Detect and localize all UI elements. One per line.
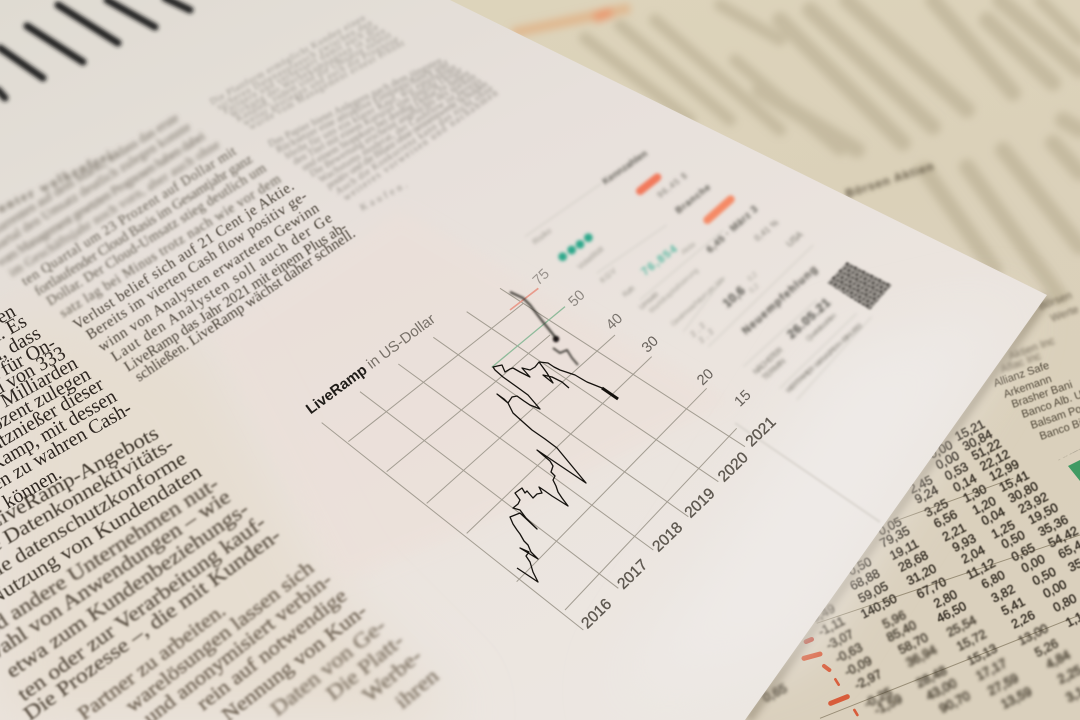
photo scene: newspaper with LiveRamp chart: 11,12	[964, 556, 998, 582]
price line: thick end	[602, 388, 618, 399]
paper: cool right tone	[620, 310, 1010, 700]
photo scene: newspaper with LiveRamp chart: 5,96	[880, 608, 908, 632]
photo scene: newspaper with LiveRamp chart: -1,11	[816, 614, 847, 639]
text block: blurred upper column B: Kaufen.	[358, 180, 409, 214]
text block: blurred upper column A: weiter gestiegen und auch die Prognose	[242, 35, 400, 129]
chart title: LiveRamp in US-Dollar	[303, 311, 439, 418]
photo scene: newspaper with LiveRamp chart: 3,25	[922, 496, 951, 520]
text block: blurred upper column B: Wachstums moderat, der Cashflow ist bereits	[317, 75, 484, 186]
year axis labels	[578, 414, 780, 632]
newsprint: blurred upper list: Werte	[1049, 304, 1080, 325]
photo scene: newspaper with LiveRamp chart: 58,70	[896, 630, 930, 657]
text block: blurred upper column A: Wirkung der Werbekampagnen in allen	[229, 26, 388, 121]
photo scene: newspaper with LiveRamp chart: 67,70	[914, 575, 949, 602]
photo scene: newspaper with LiveRamp chart: -0,25	[861, 684, 895, 711]
text block: middle article column, far lines: vom Management gesetzten Prognosen haben dabei	[0, 128, 208, 270]
photo scene: newspaper with LiveRamp chart: 25,54	[944, 613, 979, 640]
panel: stock data table: Quartalszahlen	[804, 311, 838, 343]
photo scene: newspaper with LiveRamp chart: 0,04	[979, 505, 1007, 528]
panel: stock data table: WERTPAPIER · WKN A2P6YH · ISIN US53	[785, 323, 864, 395]
photo scene: newspaper with LiveRamp chart: -1,59	[871, 691, 905, 718]
panel: stock data table: 0,2	[745, 270, 759, 283]
photo scene: newspaper with LiveRamp chart: 15,72	[954, 627, 989, 654]
photo scene: newspaper with LiveRamp chart: 2,26	[1009, 608, 1037, 632]
photo scene: newspaper with LiveRamp chart: 6,56	[931, 507, 960, 531]
text block: left article paragraph 1	[0, 300, 135, 515]
photo scene: newspaper with LiveRamp chart: 5,26	[1032, 636, 1061, 660]
text block: middle article column, near lines: winn von Analysten erwarteten Gewinn	[95, 200, 323, 355]
panel: stock data table: Risiko	[531, 226, 554, 247]
text block: blurred upper column A: sicheren Datenaustausch zwischen den	[216, 18, 375, 113]
photo scene: newspaper with LiveRamp chart: 0,65	[1009, 541, 1037, 564]
text block: blurred upper column B: und einem Stoppkurs bei dreißig Dollar zu halten	[300, 68, 472, 174]
panel: stock data table: Marktkapitalisierung	[647, 266, 700, 315]
photo scene: newspaper with LiveRamp chart: 15,13	[965, 641, 999, 668]
panel: stock data table: 2,2	[697, 327, 716, 345]
photo scene: newspaper with LiveRamp chart: 35,36	[1036, 512, 1070, 539]
panel: stock data table: TERMIN	[760, 356, 788, 382]
photo scene: newspaper with LiveRamp chart: 0,00	[927, 438, 955, 462]
text block: blurred upper column B	[266, 56, 500, 214]
table rule lines	[525, 183, 872, 400]
photo scene: newspaper with LiveRamp chart: 28,48	[913, 663, 949, 691]
photo scene: newspaper with LiveRamp chart: 1,20	[970, 494, 998, 518]
value axis labels: 75	[530, 266, 553, 289]
photo scene: newspaper with LiveRamp chart: 3,82	[989, 582, 1017, 606]
text block: middle article column, far lines: im Geschäftsjahr noch vorn, aber auch ohne	[6, 136, 222, 280]
year axis labels: 2016	[578, 596, 615, 632]
photo scene: newspaper with LiveRamp chart: -2,97	[852, 667, 884, 693]
photo scene: newspaper with LiveRamp chart: 51,22	[969, 436, 1004, 463]
newsprint: number table	[817, 478, 1080, 718]
text block: left article paragraph 3	[73, 556, 371, 720]
newsprint: blurred stock columns top right	[585, 0, 1080, 297]
photo scene: newspaper with LiveRamp chart: 13,59	[998, 684, 1034, 712]
price line: branch	[539, 362, 569, 388]
newsprint: company names list: Allianz Safe	[992, 360, 1051, 390]
photo scene: newspaper with LiveRamp chart: 27,59	[985, 670, 1021, 698]
newsprint: blurred upper list	[999, 290, 1080, 376]
newsprint: company names list: Brasher Bani	[1010, 379, 1074, 411]
value axis labels: 50	[566, 287, 589, 310]
photo scene: newspaper with LiveRamp chart: 30,84	[960, 427, 995, 454]
label: red change value	[707, 199, 731, 220]
photo scene: newspaper with LiveRamp chart: 15,41	[997, 468, 1031, 495]
sheet edge shadow	[747, 297, 1047, 720]
photo scene: newspaper with LiveRamp chart: 19,11	[887, 537, 921, 563]
photo scene: newspaper with LiveRamp chart: Daten von Ge-	[266, 614, 390, 720]
photo scene: newspaper with LiveRamp chart: 2,45	[907, 473, 935, 497]
value axis labels	[530, 266, 755, 410]
text block: middle article column, near lines: schließen. LiveRamp wächst daher schnell.	[132, 226, 358, 385]
photo scene: newspaper with LiveRamp chart: 0,80	[1051, 591, 1079, 615]
text block: blurred upper column A: wurde vom Management erneut erhöht	[248, 38, 407, 133]
photo scene: newspaper with LiveRamp chart: 0,49	[809, 601, 837, 625]
newsprint: company names list: Arkemann	[1002, 373, 1053, 401]
newsprint: green block with ANZ heading	[1054, 430, 1080, 481]
panel: stock data table: 96,45 $	[655, 170, 689, 200]
text block: middle article column, near lines: Laut den Analysten soll auch der Ge	[108, 210, 336, 365]
text block: blurred upper column A: Kanälen, zudem sind die Umsätze zuletzt	[235, 30, 394, 125]
text block: left article paragraph 1: können.	[0, 462, 66, 513]
text block: left article paragraph 3: warelösungen lassen sich	[121, 556, 318, 717]
text block: middle article column, mid lines: fortlaufender Cloud Basis im Gesamtjahr ganz	[32, 152, 256, 299]
text block: left article paragraph 2, soft lines: Die Prozesse –, die mit Kunden-	[19, 523, 285, 720]
value axis labels: 40	[603, 311, 626, 334]
year axis labels: 2017	[614, 556, 651, 593]
label: Neuempfehlung: Neuempfehlung	[740, 264, 820, 337]
newsprint: blurred upper list: Aktien Inc	[1007, 335, 1057, 363]
text block: middle article column, near lines	[70, 178, 358, 385]
line chart: LiveRamp in US-Dollar	[303, 266, 780, 632]
text block: blurred upper column B: Das Papier bietet Anlegern nach dem jüngsten	[266, 56, 444, 150]
photo scene: newspaper with LiveRamp chart: 54,42	[1046, 524, 1080, 551]
photo scene: newspaper with LiveRamp chart: 22,12	[978, 447, 1012, 474]
value axis labels: 15	[732, 387, 755, 410]
photo scene: newspaper with LiveRamp chart: 90,70	[937, 688, 973, 716]
text block: blurred upper column A: Partnern und verbessert damit auch die	[222, 23, 380, 117]
text block: middle article column, mid lines: ten Quartal um 23 Prozent auf Dollar mit	[19, 144, 239, 289]
photo scene: newspaper with LiveRamp chart: 28,68	[896, 548, 930, 575]
price line: lower section	[493, 362, 618, 582]
text block: left article paragraph 2, soft lines: ten oder zur Verarbeitung kauf-	[13, 510, 270, 705]
photo scene: newspaper with LiveRamp chart: Die Platt-	[321, 629, 408, 705]
photo scene: newspaper with LiveRamp chart: 0,53	[942, 460, 971, 483]
panel: stock data table	[525, 148, 872, 400]
newsprint: blurred upper list: Aflac Inc	[999, 350, 1043, 376]
text block: blurred upper column B: positiv und die Bilanz ohne nennenswerte Schulden	[325, 79, 490, 192]
photo scene: newspaper with LiveRamp chart: ihren	[390, 664, 443, 713]
panel: stock data table: Gewinnwachstum pro Jahr	[669, 274, 727, 328]
newsprint: blurred section heading: Börsen Aktien	[844, 159, 935, 201]
panel: stock data table: 0,2	[747, 281, 761, 295]
text block: left article paragraph 2, soft lines: etwa zum Kundenbeziehungs-	[2, 497, 253, 682]
photo scene: newspaper with LiveRamp chart: 9,24	[912, 483, 941, 507]
year axis labels: 2020	[715, 449, 752, 486]
label: green value: 76,854	[639, 243, 680, 278]
text block: blurred upper column B: Die Bewertung erscheint angesichts des starken	[308, 71, 478, 180]
panel: stock data table: Branche	[673, 182, 712, 216]
panel: stock data table: USA	[784, 229, 805, 249]
icon: blurred black bars top left	[0, 0, 190, 98]
photo scene: newspaper with LiveRamp chart: 0,50	[999, 528, 1027, 552]
photo scene: newspaper with LiveRamp chart: 0,05	[876, 515, 904, 538]
paper: warm lower left tone	[0, 300, 460, 720]
photo scene: newspaper with LiveRamp chart: 2,80	[931, 587, 960, 611]
text block: blurred upper column B: weiteres vorweisen und nachahmen	[341, 88, 500, 203]
photo scene: newspaper with LiveRamp chart: 0,00	[1019, 552, 1047, 576]
label: ratings header: Kennzahlen	[600, 148, 650, 187]
panel: stock data table: KGV	[598, 266, 619, 285]
text block: middle article column, near lines: LiveRamp das Jahr 2021 mit einem Plus ab-	[121, 219, 350, 375]
photo scene: newspaper with LiveRamp chart: 0,14	[951, 471, 979, 495]
photo scene: newspaper with LiveRamp chart: 15,21	[953, 417, 987, 444]
photo scene: newspaper with LiveRamp chart: 23,92	[1016, 490, 1050, 517]
panel: stock data table: 0,41 %	[752, 217, 781, 243]
photo scene: newspaper with LiveRamp chart: 0,00	[933, 449, 962, 472]
photo scene: newspaper with LiveRamp chart: 5,41	[999, 595, 1027, 618]
text block: blurred upper column B: bleibt für uns ein klarer Kauf, wir empfehlen	[283, 62, 458, 162]
newsprint: blurred upper list: Börsen	[1037, 290, 1074, 313]
photo scene: newspaper with LiveRamp chart: 30,80	[1006, 479, 1040, 506]
photo scene: newspaper with LiveRamp chart: 68,88	[848, 566, 882, 593]
photo scene: newspaper with LiveRamp chart: 36,94	[903, 642, 939, 670]
text block: blurred upper column A: Die Plattform ermöglicht Kunden einen	[208, 13, 368, 108]
photo scene: newspaper with LiveRamp chart: 46,50	[934, 599, 969, 626]
photo scene: newspaper with LiveRamp chart: Werbe-	[358, 644, 426, 707]
price line: upper blurred section	[510, 292, 578, 365]
photo scene: newspaper with LiveRamp chart: 0,50	[1030, 565, 1058, 588]
panel: stock data table: Aktie	[679, 239, 697, 257]
photo scene: newspaper with LiveRamp chart: 0,50	[846, 555, 874, 578]
panel: stock data table: 2,2	[689, 321, 707, 339]
year axis labels: 2018	[649, 519, 686, 556]
photo scene: newspaper with LiveRamp chart: 4,84	[1043, 647, 1073, 672]
label: bold ratio: 10,6	[720, 283, 748, 311]
photo scene: newspaper with LiveRamp chart: 2,04	[959, 543, 987, 567]
panel: stock data table: Volatilität	[575, 244, 606, 272]
value axis labels: 20	[694, 366, 717, 389]
value axis labels: 30	[639, 333, 662, 356]
table rules	[817, 478, 1080, 718]
icon: green rating dots	[558, 233, 593, 261]
text block: blurred upper column B: den Titel mit einem Kursziel von fünfzig Dollar	[291, 65, 465, 168]
text block: blurred upper column A	[208, 13, 407, 133]
newsprint: red change bars	[804, 639, 857, 715]
photo scene: newspaper with LiveRamp chart: 12,99	[987, 457, 1021, 484]
photo scene: newspaper with LiveRamp chart: 0,65	[760, 680, 789, 705]
photo scene: newspaper with LiveRamp chart: 43,00	[923, 675, 959, 703]
photo scene: newspaper with LiveRamp chart: -0,09	[842, 654, 874, 679]
newsprint: company names list	[992, 360, 1080, 443]
photo scene: newspaper with LiveRamp chart: 2,21	[940, 521, 968, 544]
photo scene: newspaper with LiveRamp chart: 0,00	[1041, 577, 1069, 601]
panel: stock data table: Umsatz	[637, 289, 661, 311]
text block: blurred upper column B: Rücksetzer eine attraktive Einstiegschance und	[274, 59, 450, 156]
photo scene: newspaper with LiveRamp chart: 17,17	[973, 655, 1009, 683]
icon: QR code	[827, 262, 892, 310]
threshold marks: stop line and target line	[510, 288, 538, 310]
text block: left article paragraph 3: rein auf notwendige	[192, 584, 351, 715]
text block: middle article column, mid lines: Dollar. Der Cloud-Umsatz stieg deutlich um	[44, 161, 269, 309]
photo scene: newspaper with LiveRamp chart: 59,05	[856, 579, 890, 606]
paper: pink chart panel tone	[212, 210, 730, 582]
photo scene: newspaper with LiveRamp chart: 140,50	[858, 591, 899, 621]
photo scene: newspaper with LiveRamp chart: 19,50	[1026, 500, 1060, 527]
text block: middle article column, near lines: Verlust belief sich auf 21 Cent je Aktie.	[70, 178, 297, 333]
photo scene: newspaper with LiveRamp chart: 6,80	[979, 568, 1007, 592]
text block: middle article column, mid lines: satz lag bei Minus trotz nach wie vor dem	[57, 172, 284, 321]
grid lines	[322, 288, 745, 630]
photo scene: newspaper with LiveRamp chart: -3,07	[824, 627, 856, 653]
photo scene: newspaper with LiveRamp chart: 1,30	[961, 482, 989, 506]
photo scene: newspaper with LiveRamp chart: 13,00	[1016, 621, 1050, 648]
newsprint: orange heading smear	[512, 8, 630, 33]
label: red price	[640, 177, 657, 191]
panel: stock data table: 6,45 · März 3	[705, 204, 761, 256]
label: next date: 26.05.21	[784, 295, 833, 342]
text block: middle article column, near lines: Bereits im vierten Cash flow positiv ge-	[83, 188, 310, 343]
text block: blurred upper column B: Auch die Konkurrenz kann das nicht ohne	[334, 83, 496, 197]
photo scene: newspaper with LiveRamp chart: 79,35	[878, 524, 912, 551]
panel: stock data table: NÄCHSTER	[751, 345, 785, 376]
photo scene: newspaper with LiveRamp chart: 9,93	[950, 531, 978, 555]
photo scene: newspaper with LiveRamp chart: -0,63	[833, 640, 865, 666]
photo scene: newspaper with LiveRamp chart: 85,40	[884, 618, 919, 645]
year axis labels: 2021	[743, 414, 780, 450]
panel: stock data table: Kurs	[620, 283, 636, 299]
photo scene: newspaper with LiveRamp chart: 1,25	[989, 518, 1017, 542]
photo scene: newspaper with LiveRamp chart: 31,20	[904, 561, 939, 588]
year axis labels: 2019	[682, 485, 719, 522]
